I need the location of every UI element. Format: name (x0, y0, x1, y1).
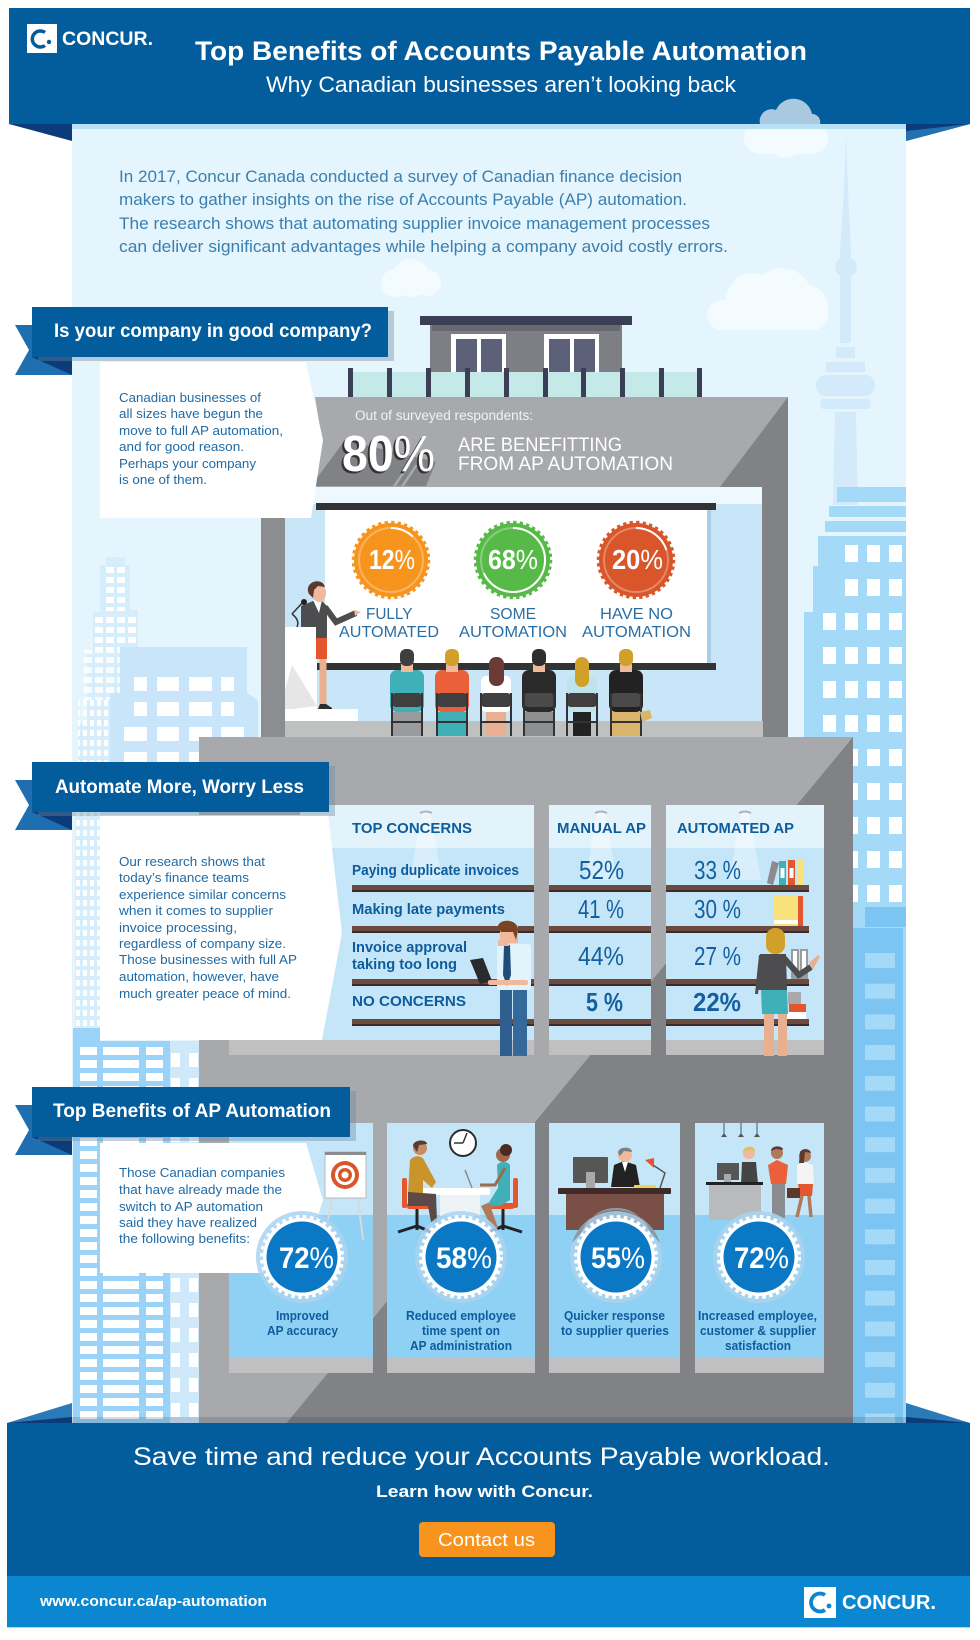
benefit badge: 58 percent time saved: AP administration (410, 1339, 512, 1353)
concerns table: column headings: MANUAL AP (557, 820, 646, 837)
logo wordmark: CONCUR. (62, 29, 153, 50)
benefit badge: 58 percent time saved: 58% (436, 1242, 492, 1275)
intro paragraph: makers to gather insights on the rise of Accounts Payable (AP) automation. (119, 191, 687, 209)
title: Top Benefits of Accounts Payable Automation (195, 36, 807, 66)
benefit statement (458, 435, 673, 475)
section banner: top benefits (15, 1087, 356, 1155)
footer logo wordmark: CONCUR. (842, 1592, 936, 1614)
audience member 2 (435, 649, 469, 736)
white text panel: benefits: switch to AP automation (119, 1199, 263, 1214)
header band (9, 8, 970, 129)
subtitle: Why Canadian businesses aren’t looking back (266, 72, 737, 97)
top building: roof penthouse (420, 316, 632, 397)
lower building shell (199, 737, 853, 1425)
benefit badge: 72 percent satisfaction: 72% (734, 1242, 789, 1275)
icon: concur logo mark (27, 24, 57, 53)
clouds (381, 122, 828, 330)
benefit badge: 72 percent satisfaction: Increased employee, (698, 1309, 817, 1323)
icon: footer concur logo mark (804, 1587, 836, 1618)
benefit badge: 58 percent time saved (406, 1211, 516, 1353)
concerns table: manual AP values: 41 % (578, 894, 624, 924)
white text panel: benefits: Those Canadian companies (119, 1165, 285, 1180)
white text panel: good company: move to full AP automation, (119, 423, 283, 438)
cloud over header edge (760, 99, 820, 124)
audience member 6 (609, 649, 652, 736)
benefit badge: 58 percent time saved: Reduced employee (406, 1309, 516, 1323)
badge: 68 percent some automation: 68% (488, 544, 538, 575)
left skyline (73, 557, 258, 1424)
concerns table: row labels: NO CONCERNS (352, 993, 466, 1010)
concerns table: automated AP values: 27 % (694, 941, 741, 971)
intro paragraph: In 2017, Concur Canada conducted a survey of Canadian finance decision (119, 168, 682, 186)
white text panel: good company: Canadian businesses of (119, 390, 261, 405)
badge: 12 percent fully automated: 12% (369, 544, 415, 575)
badge: 12 percent fully automated: AUTOMATED (339, 624, 439, 641)
audience member 5 (567, 657, 597, 736)
benefit panels backgrounds (229, 1123, 824, 1373)
badge: 12 percent fully automated (339, 522, 439, 641)
benefit badge: 72 percent AP accuracy: AP accuracy (267, 1324, 338, 1338)
white text panel: worry less: invoice processing, (119, 920, 237, 935)
badge: 20 percent no automation: AUTOMATION (582, 624, 691, 641)
concerns table: automated AP values (693, 855, 741, 1017)
white text panel: benefits: that have already made the (119, 1182, 282, 1197)
presenter at podium (285, 581, 361, 721)
concerns table: manual AP values: 44% (578, 941, 624, 971)
website url: www.concur.ca/ap-automation (39, 1593, 267, 1610)
illustration: reception desk (706, 1123, 814, 1220)
benefit badge: 72 percent satisfaction (698, 1211, 817, 1353)
concerns table: column headings (352, 820, 794, 837)
benefit badge: 55 percent supplier queries: to supplier queries (561, 1324, 669, 1338)
benefit badge: 58 percent time saved: time spent on (422, 1324, 500, 1338)
section banner: good company (15, 307, 394, 375)
section banner: top benefits: Top Benefits of AP Automation (53, 1101, 331, 1122)
white text panel: good company (100, 362, 323, 518)
benefit badge: 55 percent supplier queries: Quicker response (564, 1309, 665, 1323)
concerns table: column backgrounds (229, 805, 824, 1055)
audience member 4 (522, 649, 556, 736)
white text panel: worry less: when it comes to supplier (118, 903, 274, 918)
concerns table: row labels (352, 862, 519, 1010)
sky backdrop (72, 124, 906, 1424)
benefit badge: 72 percent satisfaction: customer & supplier (700, 1324, 816, 1338)
billboard: 80 percent (311, 397, 788, 487)
concerns table: automated AP values: 33 % (694, 855, 741, 885)
white text panel: benefits: the following benefits: (119, 1231, 250, 1246)
footer fold corners (7, 1403, 970, 1423)
concerns table: row labels: taking too long (352, 956, 457, 973)
intro paragraph: can deliver significant advantages while helping a company avoid costly errors. (119, 238, 728, 256)
concerns table: manual AP values: 52% (579, 855, 624, 885)
white text panel: good company: all sizes have begun the (119, 406, 263, 421)
section banner: automate more: Automate More, Worry Less (55, 777, 304, 798)
concerns table: column headings: TOP CONCERNS (352, 820, 472, 837)
books and binders on shelves (767, 860, 808, 1019)
contact button (419, 1522, 555, 1557)
white text panel: worry less: regardless of company size. (119, 936, 286, 951)
glass railing (348, 368, 702, 397)
footer call to action band (7, 1423, 970, 1576)
footer subhead: Learn how with Concur. (376, 1482, 593, 1501)
section banner: automate more (15, 762, 335, 830)
white text panel: worry less: Our research shows that (119, 854, 265, 869)
badge: 68 percent some automation: SOME (490, 606, 536, 623)
concerns table: row labels: Invoice approval (352, 939, 467, 956)
benefit statement: ARE BENEFITTING (458, 435, 622, 456)
benefit badge: 55 percent supplier queries: 55% (591, 1242, 645, 1275)
white text panel: good company: is one of them. (119, 472, 207, 487)
right skyline: CN tower and towers (804, 135, 906, 1424)
white text panel: worry less: experience similar concerns (119, 887, 287, 902)
concerns table: row labels: Paying duplicate invoices (352, 862, 519, 879)
header fold corners (9, 124, 970, 141)
icon: target on easel (324, 1152, 366, 1240)
badge: 68 percent some automation: AUTOMATION (459, 624, 567, 641)
illustration: manager at desk (558, 1148, 671, 1230)
white text panel: worry less: automation, however, have (119, 969, 279, 984)
white text panel: worry less: much greater peace of mind. (119, 986, 291, 1001)
white text panel: worry less: today’s finance teams (119, 870, 250, 885)
footer url band (7, 1576, 970, 1628)
footer headline: Save time and reduce your Accounts Payable workload. (133, 1443, 830, 1471)
CN tower (816, 135, 875, 505)
white text panel: benefits: said they have realized (119, 1215, 257, 1230)
benefit badge: 72 percent AP accuracy (256, 1211, 348, 1338)
white text panel: worry less (100, 815, 342, 1040)
audience seated on chairs (390, 649, 652, 736)
benefit badge: 72 percent AP accuracy: 72% (279, 1242, 334, 1275)
benefit badge: 72 percent AP accuracy: Improved (276, 1309, 329, 1323)
concerns table: shelves (352, 885, 809, 1026)
survey intro label: Out of surveyed respondents: (355, 408, 533, 423)
badge: 12 percent fully automated: FULLY (366, 606, 413, 623)
white text panel: benefits (100, 1143, 323, 1273)
audience member 3 (481, 657, 511, 736)
white text panel: good company: Perhaps your company (119, 456, 257, 471)
concerns table: manual AP values: 5 % (586, 987, 623, 1017)
benefit badge: 55 percent supplier queries (561, 1208, 669, 1338)
contact button: Contact us (438, 1530, 535, 1550)
concerns table: row labels: Making late payments (352, 901, 505, 918)
section banner: good company: Is your company in good company? (54, 321, 372, 342)
badge: 20 percent no automation (582, 522, 691, 641)
badge: 20 percent no automation: HAVE NO (600, 606, 673, 623)
concerns table: manual AP values (578, 855, 624, 1017)
concerns table: automated AP values: 22% (693, 987, 741, 1017)
top building: walls and interior (261, 487, 788, 739)
benefit statement: FROM AP AUTOMATION (458, 454, 673, 475)
intro paragraph (119, 168, 728, 256)
illustration: meeting with clock (398, 1130, 522, 1232)
white text panel: good company: and for good reason. (119, 439, 244, 454)
benefit badge: 72 percent satisfaction: satisfaction (725, 1339, 791, 1353)
man with laptop (470, 921, 531, 1056)
concerns table: column headings: AUTOMATED AP (677, 820, 794, 837)
white text panel: worry less: Those businesses with full AP (119, 952, 297, 967)
woman at shelves (755, 928, 820, 1056)
intro paragraph: The research shows that automating supplier invoice management processes (119, 215, 710, 233)
big number: 80% (342, 425, 435, 482)
badge: 20 percent no automation: 20% (612, 544, 663, 575)
projection screen (316, 503, 716, 670)
concerns table: automated AP values: 30 % (694, 894, 741, 924)
badge: 68 percent some automation (459, 522, 567, 641)
audience member 1 (390, 649, 424, 736)
